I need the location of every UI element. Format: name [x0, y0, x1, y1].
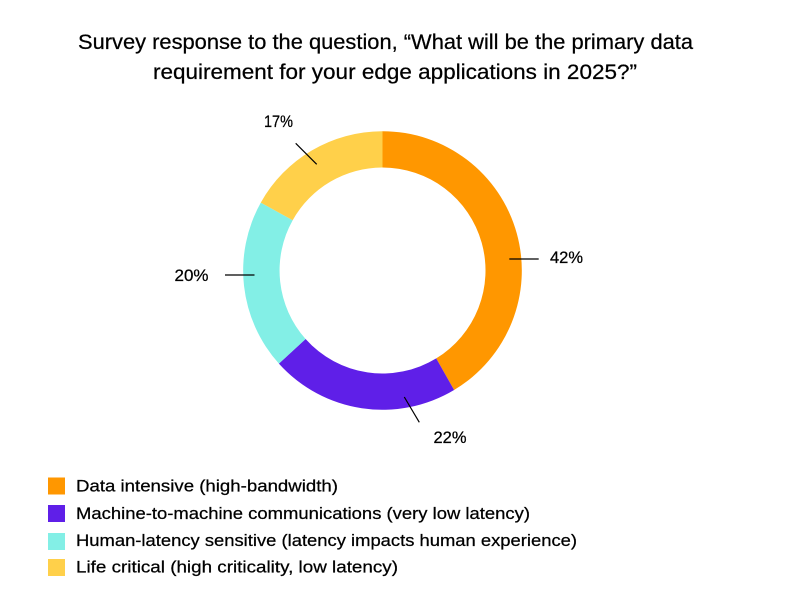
donut chart — [243, 131, 522, 410]
legend item: human-latency sensitive: Human-latency sensitive (latency impacts human experience) — [76, 531, 577, 550]
segment: data intensive 42% — [382, 131, 522, 390]
callout: 20% — [174, 267, 254, 285]
title: requirement for your edge applications in 2025?” — [153, 60, 637, 84]
legend item: machine-to-machine: Machine-to-machine communications (very low latency) — [76, 504, 530, 523]
callout: 17% — [264, 113, 317, 164]
segment: life critical 17% — [261, 131, 382, 220]
title — [78, 30, 693, 84]
legend — [48, 476, 577, 577]
callout: 22% — [404, 397, 467, 447]
callout: 20%: 20% — [174, 267, 209, 285]
callout: 42%: 42% — [550, 249, 583, 267]
legend item: data intensive: Data intensive (high-bandwidth) — [76, 476, 338, 496]
legend item: life critical: Life critical (high criticality, low latency) — [76, 558, 398, 577]
callout: 17%: 17% — [264, 113, 293, 131]
segment: human-latency sensitive 20% — [243, 203, 306, 364]
title: Survey response to the question, “What will be the primary data — [78, 30, 693, 54]
callout: 42% — [509, 249, 583, 267]
segment: machine-to-machine 22% — [279, 339, 454, 410]
callout: 22%: 22% — [434, 429, 467, 447]
